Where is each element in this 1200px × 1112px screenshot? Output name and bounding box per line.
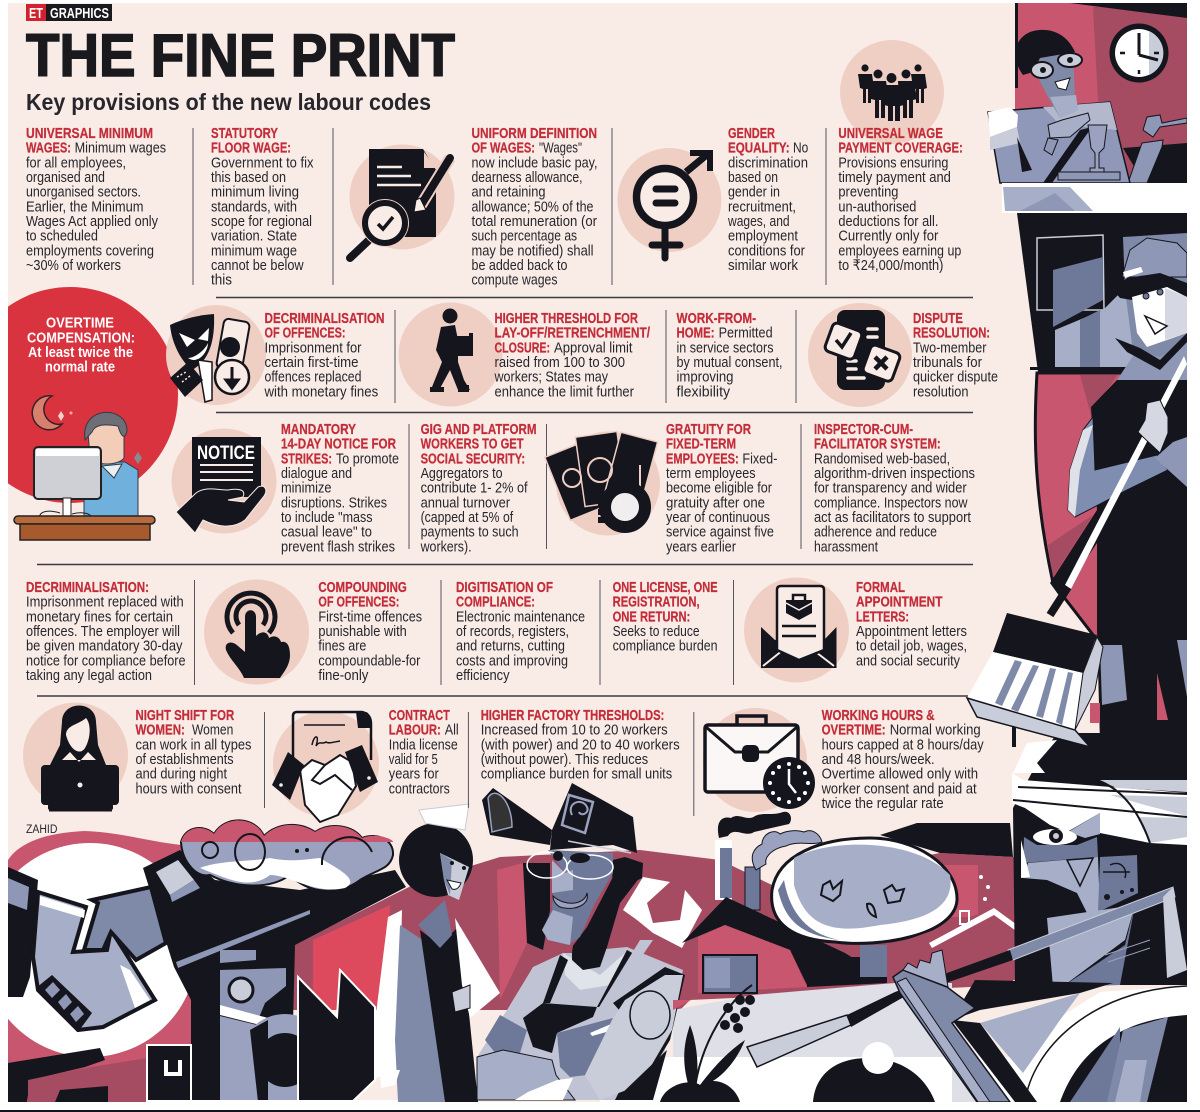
text: contract labour: CONTRACT	[389, 708, 450, 724]
text: one license, one registration, one return	[613, 580, 718, 655]
text: higher threshold for lay-off: enhance the limit further	[494, 384, 634, 400]
text: universal wage payment coverage: UNIVERSAL WAGE	[838, 126, 943, 142]
text: uniform definition of wages: "Wages"	[539, 141, 582, 157]
text: uniform definition of wages: total remuneration (or	[472, 214, 597, 230]
text: uniform definition of wages: OF WAGES:	[472, 141, 535, 157]
text: night shift for women: of establishments	[136, 752, 234, 768]
text: dispute resolution: DISPUTE	[913, 311, 963, 327]
icon: appointment letter in envelope	[744, 578, 849, 682]
text: universal wage payment coverage: deductions for all.	[838, 214, 938, 230]
text: universal minimum wages: to scheduled	[26, 229, 98, 245]
text: work from home: HOME:	[676, 326, 714, 342]
text: universal minimum wages: employments covering	[26, 243, 154, 259]
text: uniform definition of wages: be added back to	[472, 258, 568, 274]
text: gratuity for fixed-term employees	[666, 422, 778, 555]
text: gender equality: employment	[728, 229, 798, 245]
text: digitisation of compliance: and returns, cutting	[456, 639, 565, 655]
text: gratuity for fixed-term employees: FIXED-TERM	[666, 437, 736, 453]
text: one license, one registration, one return: ONE LICENSE, ONE	[613, 580, 718, 596]
panel: overtime compensation: At least twice the	[28, 345, 133, 361]
icon: document with magnifier and pen	[350, 144, 454, 258]
text: gig and platform workers: payments to such	[421, 525, 519, 541]
text: gig and platform workers: SOCIAL SECURITY:	[421, 451, 525, 467]
text: decriminalisation: offences. The employer will	[26, 624, 180, 640]
text: night shift for women: can work in all types	[136, 737, 252, 753]
text: mandatory notice for strikes: dialogue and	[281, 466, 352, 482]
text: gender equality: GENDER	[728, 126, 775, 142]
text: decriminalisation of offences: DECRIMINALISATION	[264, 311, 384, 327]
text: gratuity for fixed-term employees: years earlier	[666, 539, 736, 555]
text: compounding of offences: punishable with	[318, 624, 407, 640]
text: digitisation of compliance: efficiency	[456, 668, 510, 684]
text: universal minimum wages: for all employees,	[26, 155, 126, 171]
text: mandatory notice for strikes: minimize	[281, 481, 332, 497]
text: digitisation of compliance: Electronic maintenance	[456, 609, 585, 625]
text: gender equality: conditions for	[728, 243, 805, 259]
text: compounding of offences: compoundable-for	[318, 653, 421, 669]
text: dispute resolution: tribunals for	[913, 355, 982, 371]
text: inspector-cum-facilitator system: INSPECTOR-CUM-	[814, 422, 913, 438]
text: gig and platform workers: contribute 1- 2% of	[421, 481, 528, 497]
text: contract labour: All	[445, 723, 459, 739]
text: gig and platform workers: WORKERS TO GET	[421, 437, 524, 453]
text: higher threshold for lay-off: CLOSURE:	[494, 340, 550, 356]
text: higher factory thresholds	[481, 708, 680, 783]
icon: laid-off worker carrying a box	[398, 302, 502, 406]
text: compounding of offences: COMPOUNDING	[318, 580, 407, 596]
text: mandatory notice for strikes: to include "mass	[281, 510, 372, 526]
text: higher factory thresholds: (with power) and 20 to 40 workers	[481, 737, 680, 753]
text: decriminalisation of offences: with monetary fines	[264, 384, 378, 400]
text: compounding of offences: First-time offences	[318, 609, 422, 625]
text: universal wage payment coverage: un-authorised	[838, 199, 916, 215]
icon: notice in a hand: NOTICE	[197, 443, 255, 464]
text: inspector-cum-facilitator system: Randomised web-based,	[814, 451, 950, 467]
text: decriminalisation: DECRIMINALISATION:	[26, 580, 149, 596]
text: digitisation of compliance	[456, 580, 585, 684]
text: universal wage payment coverage: Provisions ensuring	[838, 155, 948, 171]
text: uniform definition of wages: dearness allowance,	[472, 170, 582, 186]
text: working hours and overtime: OVERTIME:	[822, 723, 886, 739]
text: night shift for women: Women	[192, 723, 233, 739]
text: gender equality: wages, and	[727, 214, 790, 230]
panel: overtime compensation: normal rate	[45, 360, 115, 376]
text: working hours and overtime: worker consent and paid at	[821, 781, 977, 797]
text: uniform definition of wages	[472, 126, 598, 289]
text: uniform definition of wages: now include basic pay,	[472, 155, 598, 171]
icon: finger tap	[204, 580, 309, 684]
text: decriminalisation of offences: OF OFFENCES:	[264, 326, 346, 342]
text: statutory floor wage: minimum wage	[211, 243, 297, 259]
text: work from home: in service sectors	[676, 340, 774, 356]
text: gratuity for fixed-term employees: gratuity after one	[666, 495, 765, 511]
text: dispute resolution	[913, 311, 998, 400]
text: gig and platform workers: GIG AND PLATFORM	[421, 422, 537, 438]
icon: woman with laptop	[23, 702, 128, 812]
text: universal wage payment coverage: preventing	[838, 185, 898, 201]
icon: banknotes and coins	[545, 431, 660, 536]
text: higher factory thresholds: Increased from 10 to 20 workers	[481, 723, 668, 739]
text: statutory floor wage: standards, with	[211, 199, 297, 215]
text: formal appointment letters: and social security	[856, 653, 961, 669]
text: work from home	[676, 311, 782, 400]
text: universal minimum wages: organised and	[26, 170, 105, 186]
text: universal minimum wages: unorganised sectors.	[26, 185, 141, 201]
text: formal appointment letters: LETTERS:	[856, 609, 909, 625]
subtitle: Key provisions of the new labour codes	[26, 89, 431, 115]
text: compounding of offences: fines are	[318, 639, 366, 655]
text: decriminalisation of offences	[264, 311, 384, 400]
text: decriminalisation of offences: offences replaced	[264, 370, 362, 386]
text: gratuity for fixed-term employees: year of continuous	[666, 510, 770, 526]
text: uniform definition of wages: compute wages	[472, 273, 558, 289]
text: universal wage payment coverage: timely payment and	[838, 170, 951, 186]
text: gig and platform workers: (capped at 5% of	[421, 510, 514, 526]
text: higher threshold for lay-off	[494, 311, 650, 400]
text: dispute resolution: Two-member	[913, 340, 987, 356]
text: decriminalisation of offences: certain first-time	[264, 355, 358, 371]
icon: contract and handshake	[272, 711, 379, 822]
text: uniform definition of wages: may be notified) shall	[472, 243, 594, 259]
text: statutory floor wage: cannot be below	[211, 258, 304, 274]
text: gender equality: discrimination	[728, 155, 808, 171]
text: contract labour: India license	[389, 737, 458, 753]
text: work from home: by mutual consent,	[676, 355, 782, 371]
text: statutory floor wage: this	[211, 273, 232, 289]
text: working hours and overtime: WORKING HOURS &	[822, 708, 935, 724]
text: decriminalisation	[26, 580, 186, 684]
icon: gender equality	[618, 148, 722, 258]
text: working hours and overtime	[821, 708, 984, 812]
illustration: handshake, machine, woman, worker, factory and farmer along the bottom	[0, 733, 1187, 1106]
text: mandatory notice for strikes	[281, 422, 399, 555]
text: formal appointment letters	[856, 580, 967, 669]
text: night shift for women: and during night	[136, 767, 227, 783]
panel: overtime compensation	[8, 287, 178, 540]
text: universal minimum wages: UNIVERSAL MINIMUM	[26, 126, 153, 142]
credit: Zahid: ZAHID	[26, 824, 57, 836]
text: work from home: flexibility	[676, 384, 731, 400]
text: universal minimum wages: Minimum wages	[75, 141, 166, 157]
icon: group of employees	[840, 40, 944, 144]
text: higher factory thresholds: HIGHER FACTORY THRESHOLDS:	[481, 708, 664, 724]
text: mandatory notice for strikes: To promote	[336, 451, 399, 467]
text: uniform definition of wages: and retaining	[472, 185, 546, 201]
illustration: office worker and sweeper, right column	[967, 3, 1187, 747]
text: work from home: WORK-FROM-	[676, 311, 756, 327]
text: universal minimum wages	[26, 126, 166, 274]
bottom rule	[0, 1110, 1200, 1112]
text: gender equality: based on	[728, 170, 778, 186]
text: digitisation of compliance: of records, registers,	[456, 624, 569, 640]
masthead: ET Graphics: GRAPHICS	[50, 5, 109, 22]
text: digitisation of compliance: costs and improving	[456, 653, 568, 669]
text: mandatory notice for strikes: casual leave" to	[281, 525, 372, 541]
text: compounding of offences: OF OFFENCES:	[318, 595, 399, 611]
text: decriminalisation: taking any legal action	[26, 668, 152, 684]
text: statutory floor wage	[211, 126, 314, 289]
text: decriminalisation: notice for compliance before	[26, 653, 186, 669]
text: formal appointment letters: APPOINTMENT	[856, 595, 943, 611]
text: formal appointment letters: Appointment letters	[856, 624, 967, 640]
text: night shift for women: hours with consent	[136, 781, 242, 797]
text: higher threshold for lay-off: workers; States may	[494, 370, 609, 386]
text: gender equality: EQUALITY:	[728, 141, 790, 157]
text: night shift for women: WOMEN:	[136, 723, 185, 739]
text: statutory floor wage: Government to fix	[211, 155, 314, 171]
text: one license, one registration, one return: Seeks to reduce	[613, 624, 700, 640]
text: contract labour: LABOUR:	[389, 723, 441, 739]
text: dispute resolution: resolution	[913, 384, 968, 400]
text: formal appointment letters: to detail job, wages,	[856, 639, 967, 655]
text: decriminalisation: Imprisonment replaced with	[26, 595, 184, 611]
text: contract labour: contractors	[389, 781, 450, 797]
text: gender equality: similar work	[728, 258, 799, 274]
text: contract labour: years for	[389, 767, 439, 783]
text: gender equality	[727, 126, 808, 274]
text: inspector-cum-facilitator system	[814, 422, 975, 555]
text: mandatory notice for strikes: 14-DAY NOTICE FOR	[281, 437, 396, 453]
text: dispute resolution: RESOLUTION:	[913, 326, 990, 342]
text: working hours and overtime: Normal working	[890, 723, 981, 739]
text: gig and platform workers: workers).	[420, 539, 472, 555]
text: mandatory notice for strikes: prevent flash strikes	[281, 539, 395, 555]
panel: overtime compensation: COMPENSATION:	[27, 330, 135, 346]
text: work from home: Permitted	[719, 326, 773, 342]
text: universal wage payment coverage: Currently only for	[838, 229, 939, 245]
text: gig and platform workers: annual turnover	[421, 495, 510, 511]
text: one license, one registration, one return: ONE RETURN:	[613, 609, 690, 625]
text: compounding of offences: fine-only	[318, 668, 369, 684]
text: decriminalisation: be given mandatory 30-day	[26, 639, 183, 655]
text: higher factory thresholds: (without power). This reduces	[481, 752, 648, 768]
text: work from home: improving	[676, 370, 734, 386]
text: formal appointment letters: FORMAL	[856, 580, 905, 596]
text: contract labour: valid for 5	[389, 752, 438, 768]
text: statutory floor wage: variation. State	[211, 229, 297, 245]
text: universal wage payment coverage: PAYMENT COVERAGE:	[838, 141, 963, 157]
text: uniform definition of wages: such percentage as	[472, 229, 577, 245]
text: inspector-cum-facilitator system: for transparency and wider	[814, 481, 967, 497]
text: higher threshold for lay-off: Approval limit	[554, 340, 632, 356]
text: inspector-cum-facilitator system: act as facilitators to support	[814, 510, 971, 526]
text: higher threshold for lay-off: LAY-OFF/RETRENCHMENT/	[494, 326, 650, 342]
masthead: ET Graphics	[26, 4, 112, 22]
masthead: ET Graphics: ET	[29, 5, 43, 22]
icon: dispute cards on a phone	[808, 303, 912, 407]
text: higher threshold for lay-off: HIGHER THRESHOLD FOR	[494, 311, 638, 327]
icon: notice in a hand	[172, 428, 276, 534]
title: THE FINE PRINT	[26, 22, 455, 89]
text: mandatory notice for strikes: STRIKES:	[281, 451, 332, 467]
text: compounding of offences	[318, 580, 422, 684]
text: gratuity for fixed-term employees: GRATUITY FOR	[666, 422, 751, 438]
text: uniform definition of wages: UNIFORM DEFINITION	[472, 126, 597, 142]
text: gender equality: gender in	[728, 185, 780, 201]
text: higher factory thresholds: compliance burden for small units	[481, 767, 672, 783]
text: statutory floor wage: STATUTORY	[211, 126, 278, 142]
text: universal minimum wages: WAGES:	[26, 141, 71, 157]
text: statutory floor wage: this based on	[211, 170, 286, 186]
text: gig and platform workers: Aggregators to	[421, 466, 503, 482]
text: working hours and overtime: hours capped at 8 hours/day	[822, 737, 984, 753]
text: digitisation of compliance: COMPLIANCE:	[456, 595, 535, 611]
text: inspector-cum-facilitator system: FACILITATOR SYSTEM:	[814, 437, 941, 453]
text: mandatory notice for strikes: MANDATORY	[281, 422, 356, 438]
text: night shift for women	[136, 708, 252, 797]
text: gratuity for fixed-term employees: become eligible for	[666, 481, 772, 497]
text: statutory floor wage: minimum living	[211, 185, 299, 201]
text: inspector-cum-facilitator system: compliance. Inspectors now	[814, 495, 968, 511]
text: gratuity for fixed-term employees: term employees	[666, 466, 756, 482]
section dividers	[37, 128, 973, 816]
text: gratuity for fixed-term employees: Fixed-	[742, 451, 778, 467]
text: gratuity for fixed-term employees: service against five	[666, 525, 774, 541]
text: contract labour	[389, 708, 459, 797]
text: working hours and overtime: and 48 hours/week.	[822, 752, 935, 768]
text: universal wage payment coverage: employees earning up	[838, 243, 961, 259]
text: gender equality: recruitment,	[728, 199, 796, 215]
text: decriminalisation: monetary fines for certain	[26, 609, 173, 625]
text: universal wage payment coverage	[838, 126, 963, 274]
text: decriminalisation of offences: Imprisonment for	[264, 340, 362, 356]
text: working hours and overtime: twice the regular rate	[822, 796, 944, 812]
text: one license, one registration, one return: compliance burden	[613, 639, 718, 655]
text: universal wage payment coverage: to ₹24,000/month)	[838, 258, 943, 274]
text: statutory floor wage: FLOOR WAGE:	[211, 141, 291, 157]
text: inspector-cum-facilitator system: harassment	[814, 539, 878, 555]
text: inspector-cum-facilitator system: algorithm-driven inspections	[814, 466, 975, 482]
text: night shift for women: NIGHT SHIFT FOR	[136, 708, 235, 724]
text: gratuity for fixed-term employees: EMPLOYEES:	[666, 451, 739, 467]
text: gender equality: No	[793, 141, 808, 157]
text: mandatory notice for strikes: disruptions. Strikes	[281, 495, 387, 511]
text: universal minimum wages: ~30% of workers	[26, 258, 121, 274]
text: uniform definition of wages: allowance; 50% of the	[472, 199, 594, 215]
text: gig and platform workers	[420, 422, 537, 555]
text: digitisation of compliance: DIGITISATION OF	[456, 580, 553, 596]
icon: briefcase and clock	[703, 708, 815, 812]
text: dispute resolution: quicker dispute	[913, 370, 998, 386]
panel: overtime compensation: OVERTIME	[46, 316, 114, 332]
text: statutory floor wage: scope for regional	[211, 214, 312, 230]
text: one license, one registration, one return: REGISTRATION,	[613, 595, 700, 611]
text: universal minimum wages: Earlier, the Minimum	[26, 199, 144, 215]
text: inspector-cum-facilitator system: adherence and reduce	[814, 525, 937, 541]
text: universal minimum wages: Wages Act applied only	[26, 214, 159, 230]
icon: masks, phone and card	[166, 305, 266, 405]
text: higher threshold for lay-off: raised from 100 to 300	[494, 355, 625, 371]
text: working hours and overtime: Overtime allowed only with	[822, 767, 978, 783]
